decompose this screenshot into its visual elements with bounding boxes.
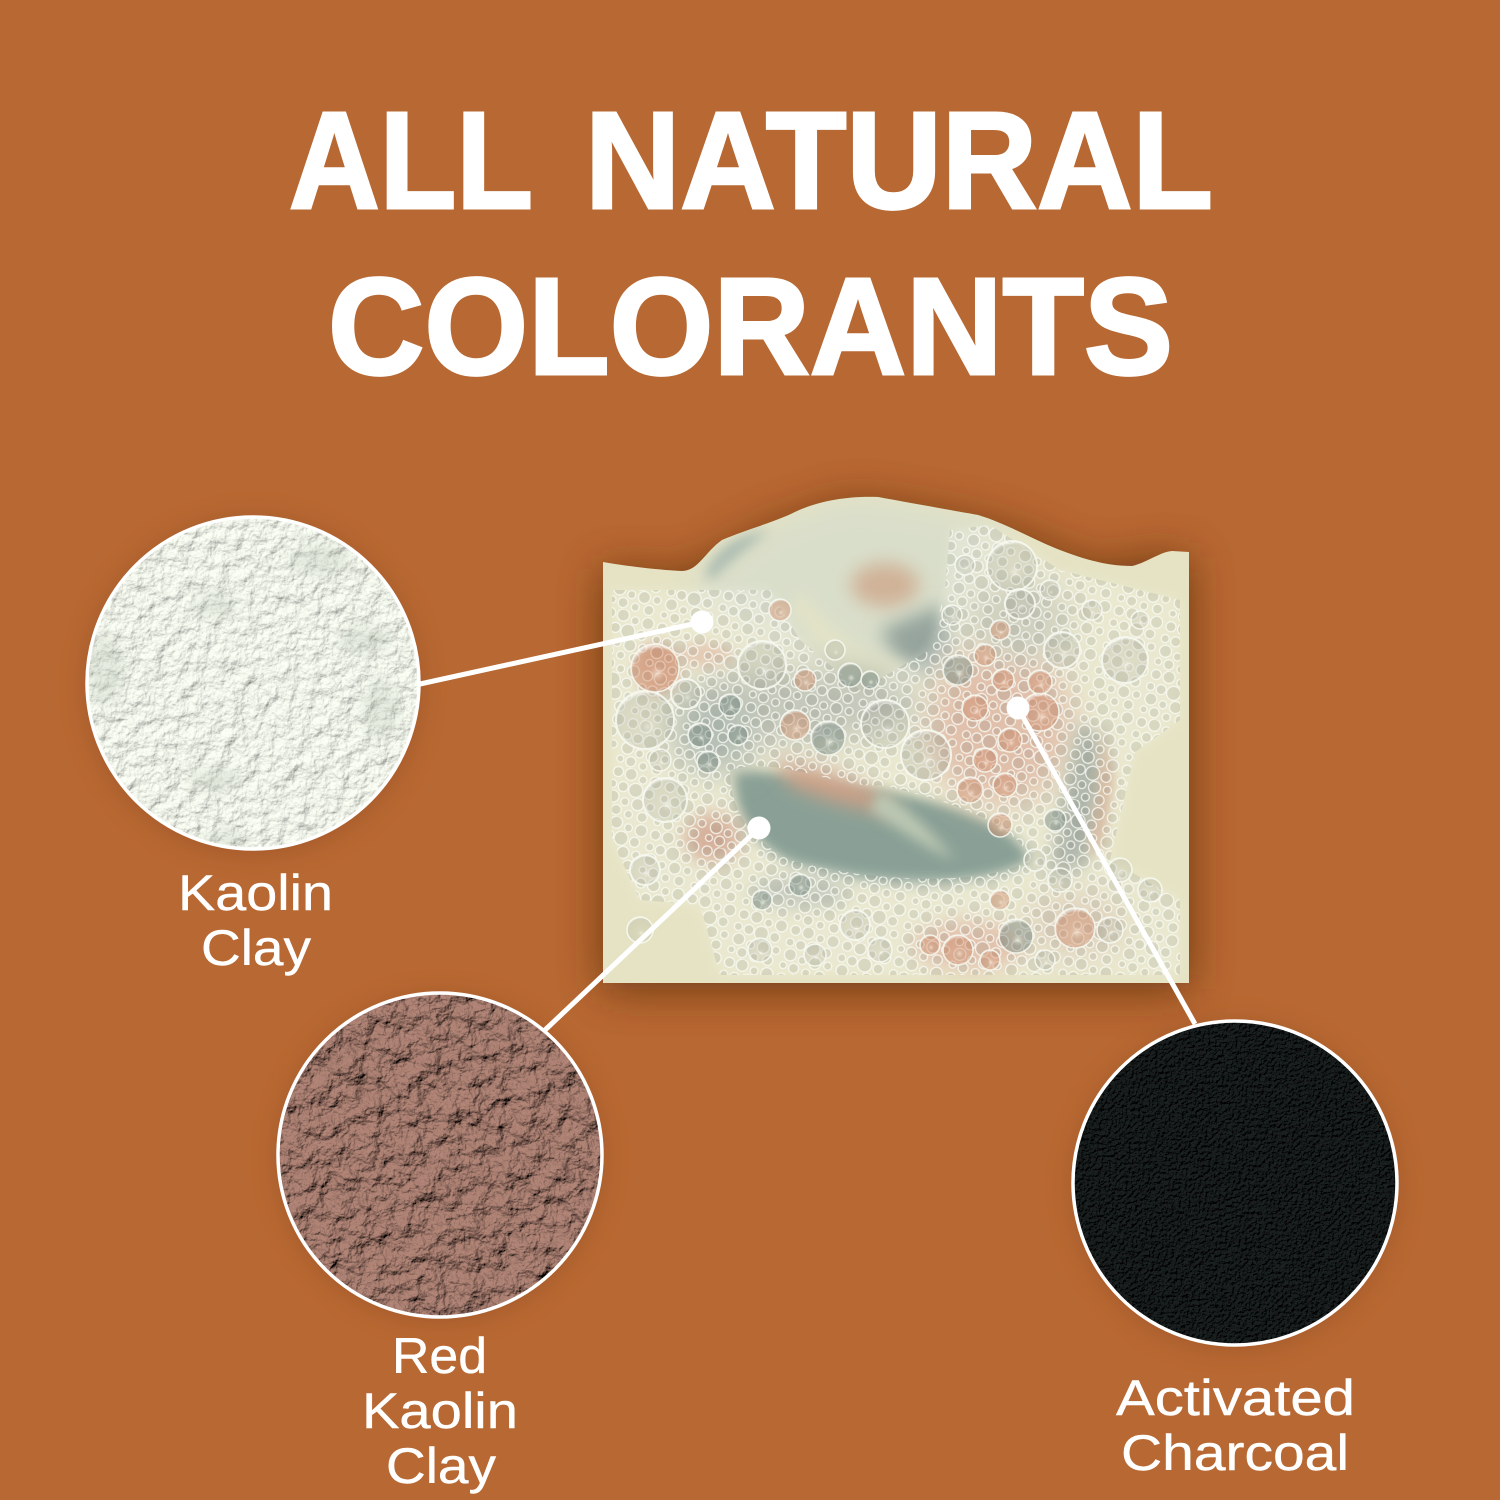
connector: activated charcoal bbox=[1006, 696, 1195, 1024]
large bubbles bbox=[616, 541, 1162, 970]
swirl: grey left bbox=[673, 697, 757, 773]
swirl: bottom orange bbox=[912, 921, 1028, 969]
soap top cap bbox=[690, 496, 1006, 654]
swirl: mid tint bbox=[680, 669, 920, 741]
connector: red kaolin clay bbox=[545, 816, 770, 1030]
foam texture bbox=[612, 525, 1180, 975]
swirl: orange small bbox=[677, 643, 733, 667]
swirl: central orange bbox=[770, 755, 900, 815]
swatch: kaolin clay powder bbox=[85, 515, 421, 851]
label: kaolin clay: Clay bbox=[201, 920, 311, 976]
label: red kaolin clay: Kaolin bbox=[362, 1383, 518, 1439]
swirl: central cream bbox=[870, 790, 955, 860]
swirl: bottom right tint bbox=[1025, 895, 1125, 955]
label: red kaolin clay: Red bbox=[392, 1328, 487, 1384]
swatch: red kaolin clay powder bbox=[276, 991, 604, 1319]
foam whitening bbox=[612, 525, 1180, 975]
label: red kaolin clay bbox=[362, 1328, 518, 1494]
title: COLORANTS bbox=[328, 250, 1173, 404]
label: red kaolin clay: Clay bbox=[386, 1438, 496, 1494]
title: ALL bbox=[289, 84, 533, 238]
connector: kaolin clay bbox=[420, 610, 714, 684]
swirl: right grey bbox=[1050, 725, 1102, 875]
swirl: upper orange bbox=[851, 563, 919, 607]
swirl: bottom grey bbox=[750, 876, 850, 908]
soap bar bbox=[600, 490, 1192, 986]
swirl: left orange bbox=[685, 814, 741, 862]
label: activated charcoal: Charcoal bbox=[1121, 1425, 1349, 1481]
grey-green ridge bbox=[705, 530, 770, 580]
swirl: orange right bbox=[928, 645, 1072, 805]
swirl: right top tint bbox=[970, 580, 1070, 660]
swirl: upper grey bbox=[880, 605, 955, 680]
upper cream band bbox=[888, 658, 898, 664]
swirl: right orange edge bbox=[1090, 725, 1112, 855]
circle shadows bbox=[83, 516, 1400, 1351]
swirl: orange top left bbox=[636, 642, 680, 694]
soap shadow bbox=[603, 503, 1189, 989]
title bbox=[289, 84, 1213, 404]
label: kaolin clay: Kaolin bbox=[178, 865, 333, 921]
label: activated charcoal: Activated bbox=[1116, 1370, 1355, 1426]
swatch: activated charcoal powder bbox=[1071, 1019, 1399, 1347]
swirl: central grey bbox=[734, 771, 1030, 885]
label: activated charcoal bbox=[1116, 1370, 1355, 1481]
label: kaolin clay bbox=[178, 865, 333, 976]
title: NATURAL bbox=[585, 84, 1213, 238]
